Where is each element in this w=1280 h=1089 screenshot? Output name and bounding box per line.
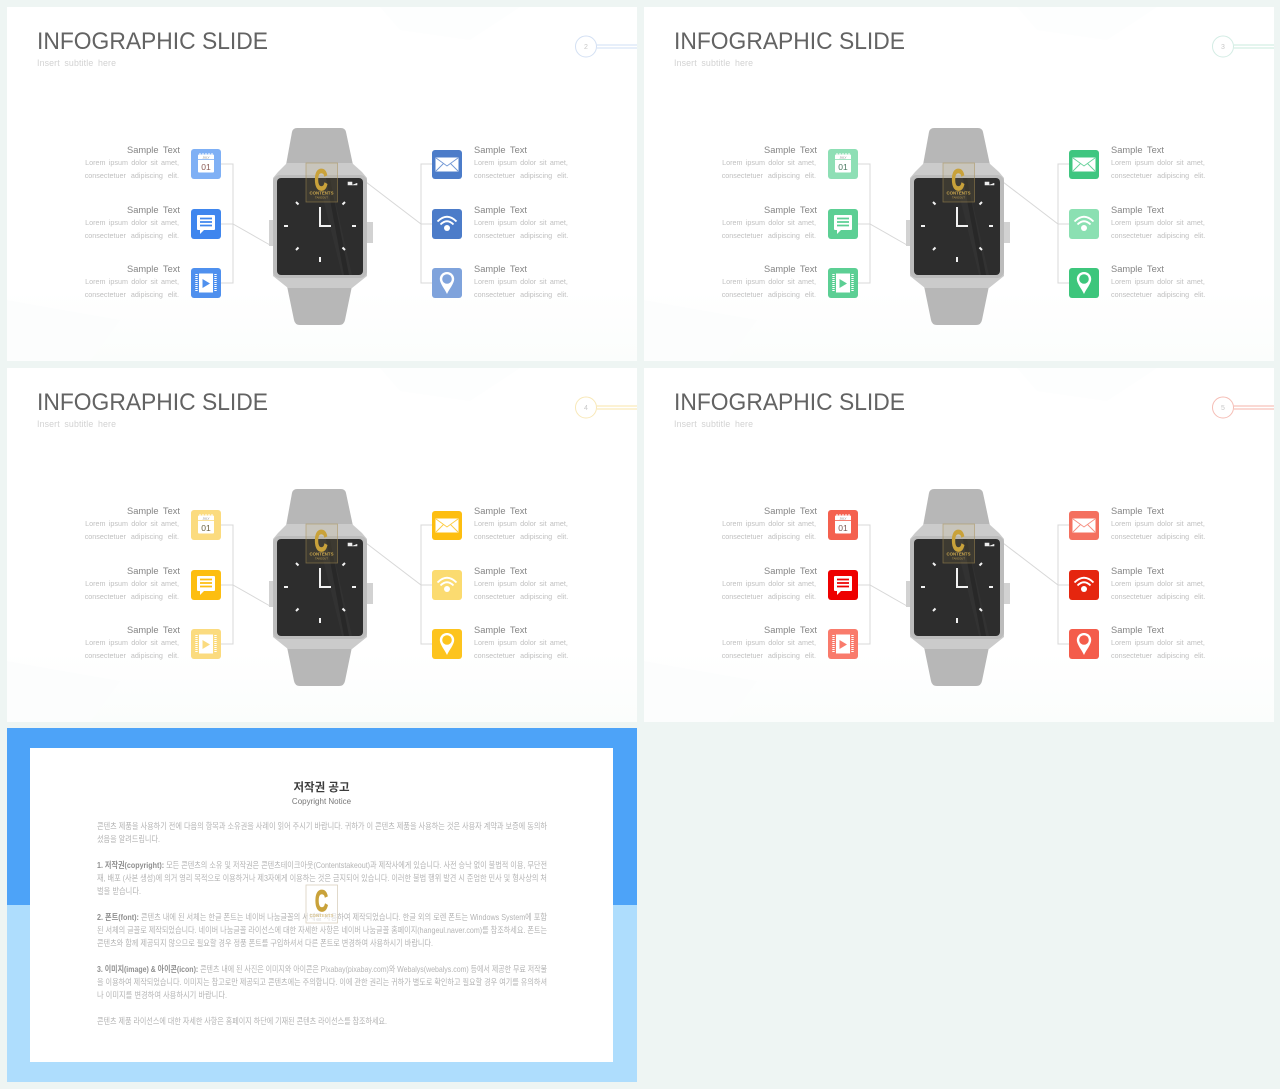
connector lines	[858, 164, 1099, 283]
left item 2: chat	[85, 205, 221, 240]
section 3: image and icon: 을 이용하여 제작되었습니다. 이미지는 참고로만 제공되고 콘텐츠에는 주의합니다. 이에 관한 권리는 귀하가 별도로 확인하고 필요할 경우 여기를 유의하셔	[97, 977, 547, 987]
right item 3: pin: Sample Text	[474, 625, 527, 635]
left item 1: calendar: JULY	[839, 156, 847, 160]
left item 1: calendar: 01	[201, 523, 211, 533]
right item 3: pin	[1069, 625, 1205, 660]
right item 1: mail: Sample Text	[1111, 506, 1164, 516]
page number badge	[1212, 36, 1274, 57]
left item 3: video	[85, 625, 221, 660]
left item 2: chat: Lorem ipsum dolor sit amet,	[722, 579, 816, 588]
smartwatch	[906, 128, 1010, 325]
right item 3: pin: Sample Text	[1111, 625, 1164, 635]
right item 1: mail: Sample Text	[1111, 145, 1164, 155]
left item 1: calendar: JULY	[839, 516, 847, 520]
right item 2: wifi	[432, 566, 568, 601]
section 3: image and icon: 3. 이미지(image) & 아이콘(icon): 콘텐츠 내에 된 사진은 이미지와 아이콘은 Pixabay(pixabay.com)와 Webalys(webalys.com) 등에서 제공한 무료 저작물	[97, 964, 547, 974]
left item 3: video	[85, 264, 221, 299]
right item 3: pin: Lorem ipsum dolor sit amet,	[474, 638, 568, 647]
left item 2: chat	[85, 566, 221, 601]
left item 1: calendar: Lorem ipsum dolor sit amet,	[722, 519, 816, 528]
smartwatch: C	[314, 525, 328, 558]
smartwatch	[269, 489, 373, 686]
two-tone blue background	[7, 728, 637, 1082]
right item 2: wifi: Lorem ipsum dolor sit amet,	[1111, 579, 1205, 588]
title: INFOGRAPHIC SLIDE	[37, 28, 268, 55]
left item 3: video: consectetuer adipiscing elit.	[722, 290, 816, 299]
right item 3: pin: consectetuer adipiscing elit.	[474, 651, 568, 660]
left item 1: calendar	[85, 145, 221, 180]
smartwatch: CONTENTS	[946, 552, 970, 556]
left item 3: video: Lorem ipsum dolor sit amet,	[85, 638, 179, 647]
left item 3: video: Sample Text	[127, 625, 180, 635]
section 3: image and icon: 나 이미지를 변경하여 사용하시기 바랍니다.	[97, 990, 227, 1000]
page number badge: 5	[1221, 405, 1225, 412]
smartwatch: C	[952, 164, 964, 197]
right item 2: wifi: Sample Text	[474, 566, 527, 576]
left item 2: chat: consectetuer adipiscing elit.	[722, 231, 816, 240]
right item 1: mail: Lorem ipsum dolor sit amet,	[474, 519, 568, 528]
page number badge	[576, 36, 637, 57]
watermark logo	[306, 885, 338, 923]
right item 3: pin: Sample Text	[474, 264, 527, 274]
notice subheading: Copyright Notice	[292, 797, 352, 806]
smartwatch: C	[314, 164, 328, 197]
left item 3: video: consectetuer adipiscing elit.	[722, 651, 816, 660]
smartwatch: CONTENTS	[946, 190, 970, 196]
left item 3: video: Lorem ipsum dolor sit amet,	[85, 277, 179, 286]
right item 1: mail	[432, 506, 568, 541]
left item 1: calendar: 01	[201, 162, 211, 172]
right item 2: wifi: consectetuer adipiscing elit.	[1111, 231, 1205, 240]
left item 2: chat: consectetuer adipiscing elit.	[85, 231, 179, 240]
left item 3: video	[722, 625, 858, 660]
left item 1: calendar: 01	[838, 523, 848, 533]
right item 1: mail: Sample Text	[474, 506, 527, 516]
slide 1: blue infographic	[7, 7, 637, 361]
smartwatch: TAKEOUT	[952, 556, 965, 560]
section 2: font: 2. 폰트(font): 콘텐츠 내에 된 서체는 한글 폰트는 네이버 나눔글꼴의 서체를 사용하여 제작되었습니다. 한글 외의 로렌 폰트는 Windows System에 포함	[97, 912, 547, 922]
right item 1: mail: Sample Text	[474, 145, 527, 155]
right item 1: mail: consectetuer adipiscing elit.	[1111, 171, 1205, 180]
slide 4: red infographic	[644, 368, 1274, 722]
connector lines	[858, 525, 1099, 644]
right item 2: wifi: Lorem ipsum dolor sit amet,	[1111, 218, 1205, 227]
right item 3: pin: Lorem ipsum dolor sit amet,	[474, 277, 568, 286]
left item 3: video	[722, 264, 858, 299]
section 2: font: 된 서체의 글꼴로 제작되었습니다. 네이버 나눔글꼴 라이선스에 대한 자세한 사항은 네이버 나눔글꼴 홈페이지(hangeul.naver.com)를 참조하세요. 폰트는	[97, 925, 547, 935]
right item 1: mail: consectetuer adipiscing elit.	[474, 171, 568, 180]
right item 1: mail	[432, 145, 568, 180]
left item 1: calendar: Sample Text	[764, 506, 817, 516]
right item 2: wifi: Sample Text	[474, 205, 527, 215]
title: INFOGRAPHIC SLIDE	[37, 389, 268, 416]
section 1: copyright: 재, 배포 (사본 생성)에 의거 영리 목적으로 이용하거나 제3자에게 이용하는 것은 금지되어 있습니다. 이러한 불법 행위 발견 시 준엄한 민사 및 형사상의 처	[97, 873, 547, 883]
left item 1: calendar: Sample Text	[127, 145, 180, 155]
smartwatch	[906, 489, 1010, 686]
title: INFOGRAPHIC SLIDE	[674, 389, 905, 416]
title: INFOGRAPHIC SLIDE	[674, 28, 905, 55]
left item 1: calendar: consectetuer adipiscing elit.	[722, 171, 816, 180]
left item 2: chat: Lorem ipsum dolor sit amet,	[722, 218, 816, 227]
section 3: image and icon	[97, 964, 547, 1000]
subtitle: Insert subtitle here	[37, 58, 116, 68]
page number badge: 2	[584, 44, 588, 51]
right item 3: pin: consectetuer adipiscing elit.	[1111, 651, 1205, 660]
white notice panel	[30, 748, 613, 1062]
right item 1: mail	[1069, 145, 1205, 180]
right item 1: mail	[1069, 506, 1205, 541]
smartwatch: TAKEOUT	[952, 196, 965, 200]
section 1: copyright: 1. 저작권(copyright): 모든 콘텐츠의 소유 및 저작권은 콘텐츠테이크아웃(Contentstakeout)과 제작사에게 있습니다. 사전 승낙 없이 불법적 이용, 무단전	[97, 860, 547, 870]
section 2: font: 콘텐츠와 함께 제공되지 않으므로 필요할 경우 정품 폰트를 구입하셔서 다른 폰트로 변경하여 사용하시기 바랍니다.	[97, 938, 433, 948]
right item 3: pin	[1069, 264, 1205, 299]
left item 3: video: consectetuer adipiscing elit.	[85, 290, 179, 299]
right item 2: wifi: Sample Text	[1111, 205, 1164, 215]
smartwatch: TAKEOUT	[315, 556, 328, 560]
page number badge	[1212, 397, 1274, 418]
slide 2: green infographic	[644, 7, 1274, 361]
intro paragraph: 셨음을 알려드립니다.	[97, 834, 160, 844]
left item 1: calendar: consectetuer adipiscing elit.	[722, 532, 816, 541]
left item 3: video: Sample Text	[764, 625, 817, 635]
right item 2: wifi	[1069, 205, 1205, 240]
right item 3: pin: Lorem ipsum dolor sit amet,	[1111, 277, 1205, 286]
left item 2: chat: Sample Text	[127, 205, 180, 215]
right item 2: wifi	[432, 205, 568, 240]
left item 1: calendar	[722, 506, 858, 541]
section 2: font	[97, 912, 547, 948]
page number badge	[576, 397, 637, 418]
right item 1: mail: Lorem ipsum dolor sit amet,	[474, 158, 568, 167]
left item 3: video: consectetuer adipiscing elit.	[85, 651, 179, 660]
left item 2: chat: Sample Text	[764, 566, 817, 576]
smartwatch	[269, 128, 373, 325]
intro paragraph	[97, 821, 547, 844]
left item 3: video: Sample Text	[764, 264, 817, 274]
left item 3: video: Lorem ipsum dolor sit amet,	[722, 277, 816, 286]
intro paragraph: 콘텐츠 제품을 사용하기 전에 다음의 항목과 소유권을 사례이 읽어 주시기 바랍니다. 귀하가 이 콘텐츠 제품을 사용하는 것은 사용자 계약과 보증에 동의하	[97, 821, 547, 831]
right item 3: pin	[432, 264, 568, 299]
left item 1: calendar: 01	[838, 162, 848, 172]
connector lines	[221, 164, 462, 283]
section 1: copyright	[97, 860, 547, 896]
left item 1: calendar: consectetuer adipiscing elit.	[85, 171, 179, 180]
notice heading: 저작권 공고	[293, 780, 350, 794]
left item 2: chat	[722, 205, 858, 240]
left item 1: calendar: consectetuer adipiscing elit.	[85, 532, 179, 541]
page number badge: 3	[1221, 44, 1225, 51]
page number badge: 4	[584, 405, 588, 412]
left item 2: chat: Sample Text	[764, 205, 817, 215]
left item 3: video: Lorem ipsum dolor sit amet,	[722, 638, 816, 647]
left item 2: chat: Sample Text	[127, 566, 180, 576]
right item 3: pin	[432, 625, 568, 660]
left item 2: chat: Lorem ipsum dolor sit amet,	[85, 218, 179, 227]
closing line: 콘텐츠 제품 라이선스에 대한 자세한 사항은 홈페이지 하단에 기재된 콘텐츠 라이선스를 참조하세요.	[97, 1016, 387, 1026]
left item 1: calendar	[722, 145, 858, 180]
left item 2: chat	[722, 566, 858, 601]
subtitle: Insert subtitle here	[37, 419, 116, 429]
right item 3: pin: Lorem ipsum dolor sit amet,	[1111, 638, 1205, 647]
watermark logo: CONTENTS	[310, 913, 334, 918]
left item 1: calendar	[85, 506, 221, 541]
smartwatch: TAKEOUT	[315, 196, 328, 200]
slide 3: yellow infographic	[7, 368, 637, 722]
right item 2: wifi: Lorem ipsum dolor sit amet,	[474, 218, 568, 227]
right item 3: pin: consectetuer adipiscing elit.	[1111, 290, 1205, 299]
section 1: copyright: 벌을 받습니다.	[97, 886, 141, 896]
right item 2: wifi: consectetuer adipiscing elit.	[1111, 592, 1205, 601]
right item 3: pin: Sample Text	[1111, 264, 1164, 274]
left item 1: calendar: JULY	[202, 156, 210, 160]
subtitle: Insert subtitle here	[674, 419, 753, 429]
right item 1: mail: consectetuer adipiscing elit.	[474, 532, 568, 541]
right item 2: wifi: consectetuer adipiscing elit.	[474, 592, 568, 601]
slide 5: copyright notice	[7, 728, 637, 1082]
left item 1: calendar: JULY	[202, 516, 210, 520]
left item 1: calendar: Lorem ipsum dolor sit amet,	[85, 519, 179, 528]
left item 2: chat: consectetuer adipiscing elit.	[722, 592, 816, 601]
smartwatch: CONTENTS	[310, 190, 334, 196]
right item 3: pin: consectetuer adipiscing elit.	[474, 290, 568, 299]
right item 2: wifi: consectetuer adipiscing elit.	[474, 231, 568, 240]
left item 1: calendar: Lorem ipsum dolor sit amet,	[722, 158, 816, 167]
subtitle: Insert subtitle here	[674, 58, 753, 68]
watermark logo: C	[315, 885, 328, 918]
connector lines	[221, 525, 462, 644]
right item 2: wifi: Lorem ipsum dolor sit amet,	[474, 579, 568, 588]
smartwatch: CONTENTS	[310, 552, 334, 556]
left item 1: calendar: Sample Text	[764, 145, 817, 155]
right item 1: mail: Lorem ipsum dolor sit amet,	[1111, 519, 1205, 528]
left item 3: video: Sample Text	[127, 264, 180, 274]
right item 2: wifi	[1069, 566, 1205, 601]
left item 2: chat: consectetuer adipiscing elit.	[85, 592, 179, 601]
left item 1: calendar: Sample Text	[127, 506, 180, 516]
left item 2: chat: Lorem ipsum dolor sit amet,	[85, 579, 179, 588]
smartwatch: C	[952, 525, 964, 558]
right item 1: mail: consectetuer adipiscing elit.	[1111, 532, 1205, 541]
left item 1: calendar: Lorem ipsum dolor sit amet,	[85, 158, 179, 167]
right item 1: mail: Lorem ipsum dolor sit amet,	[1111, 158, 1205, 167]
right item 2: wifi: Sample Text	[1111, 566, 1164, 576]
